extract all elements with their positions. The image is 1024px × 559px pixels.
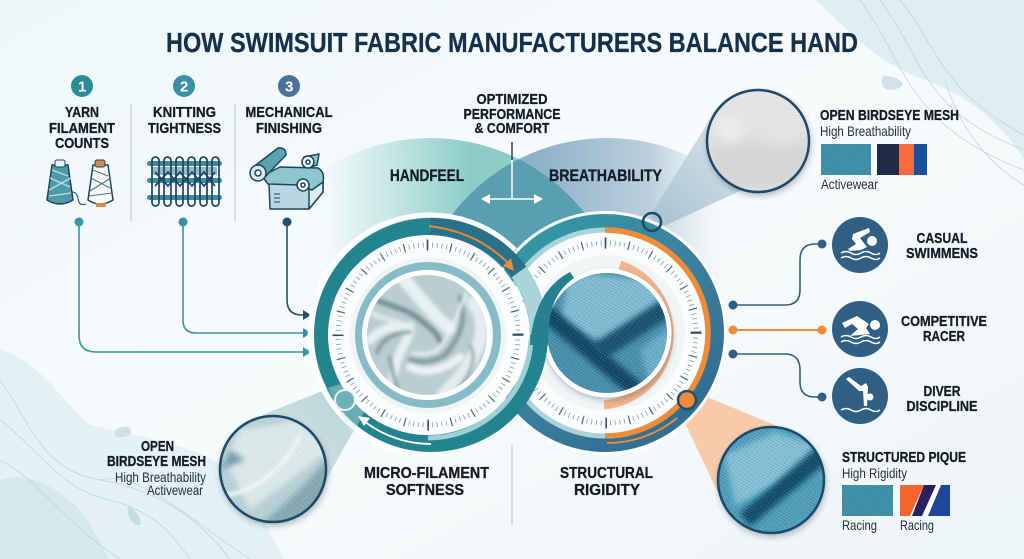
label: structural rigidity: STRUCTURAL — [560, 465, 653, 482]
step 1: yarn filament counts: COUNTS — [55, 135, 109, 152]
step 2: knitting tightness: KNITTING — [153, 104, 216, 121]
text: diver discipline: DISCIPLINE — [906, 398, 978, 415]
text: open birdseye mesh left: High Breathability — [115, 469, 206, 485]
swatch: racing stripes — [900, 485, 950, 516]
swatch: navy orange blue — [877, 144, 927, 175]
step 1: yarn filament counts: 1 — [78, 78, 86, 96]
title: HOW SWIMSUIT FABRIC MANUFACTURERS BALANCE HAND — [166, 27, 858, 58]
fabric photo: silk — [365, 273, 490, 398]
fabric swatch circle: open birdseye mesh top — [705, 88, 811, 194]
connectors from right dial to swimmers — [728, 240, 826, 402]
dial ticks — [338, 245, 518, 425]
text: casual swimmens — [906, 230, 978, 262]
label: micro-filament softness: MICRO-FILAMENT — [364, 465, 489, 482]
step 1: yarn filament counts: YARN — [65, 104, 99, 121]
label: optimized performance and comfort: PERFORMANCE — [464, 106, 560, 123]
text: open birdseye mesh top right — [820, 107, 959, 192]
marker: left dial — [335, 390, 355, 410]
step 3: mechanical finishing: 3 — [285, 78, 293, 96]
icon: yarn spools — [47, 160, 113, 207]
step 3: mechanical finishing: FINISHING — [256, 120, 322, 137]
dial ticks — [516, 243, 696, 423]
venn overlap arrow — [481, 142, 543, 204]
orange progress band — [605, 230, 708, 436]
text: open birdseye mesh left: BIRDSEYE MESH — [107, 453, 206, 470]
label: micro-filament softness: SOFTNESS — [386, 482, 464, 499]
peach arc — [604, 265, 669, 405]
text: structured pique: Racing — [842, 517, 877, 533]
white outline of left ring — [310, 215, 515, 453]
text: structured pique: Racing — [900, 517, 934, 533]
light ring segment — [519, 272, 539, 335]
column dividers — [131, 104, 235, 221]
text: diver discipline — [906, 383, 978, 415]
heading: handfeel: HANDFEEL — [390, 166, 464, 185]
icon: competitive swimmer — [832, 301, 888, 357]
label: structural rigidity: RIGIDITY — [574, 482, 640, 499]
step 1: yarn filament counts: FILAMENT — [49, 120, 115, 137]
step 2: knitting tightness — [147, 75, 222, 206]
text: casual swimmens: SWIMMENS — [906, 245, 978, 262]
text: competitive racer: COMPETITIVE — [901, 313, 987, 330]
white direction arrow — [358, 416, 431, 444]
orange direction arrow — [429, 226, 514, 271]
text: structured pique — [842, 449, 966, 533]
text: open birdseye mesh top right: OPEN BIRDSEYE MESH — [820, 107, 959, 124]
interlocking curve between dials — [530, 272, 574, 345]
label: micro-filament softness — [364, 465, 489, 499]
icon: casual swimmer — [832, 217, 888, 273]
label: structural rigidity — [560, 465, 653, 499]
text: casual swimmens: CASUAL — [916, 230, 968, 247]
callout wedge: bottom left — [262, 384, 364, 480]
label: optimized performance and comfort — [464, 91, 560, 137]
text: structured pique: High Rigidity — [842, 465, 907, 481]
label: optimized performance and comfort: OPTIMIZED — [476, 91, 548, 108]
marker: right dial bottom — [678, 391, 696, 409]
venn lenses: handfeel and breathability — [336, 138, 708, 268]
wedge tint over left ring — [328, 384, 364, 436]
text: competitive racer: RACER — [923, 328, 965, 345]
light inner band lower right — [428, 340, 531, 438]
step 1: yarn filament counts — [47, 75, 115, 207]
text: open birdseye mesh top right: High Breathability — [820, 123, 911, 139]
step 3: mechanical finishing — [246, 75, 332, 209]
fabric swatch circle: structured pique — [716, 425, 826, 535]
swatch: teal fabric — [842, 485, 893, 516]
icon: finishing machine — [250, 148, 323, 209]
fabric photo: structured pique — [548, 273, 667, 393]
text: diver discipline: DIVER — [924, 383, 961, 400]
left dial — [310, 215, 539, 453]
fabric swatch circle: open birdseye mesh left — [218, 414, 330, 526]
light teal inner band — [502, 230, 708, 436]
heading: breathability: BREATHABILITY — [549, 166, 663, 185]
step 2: knitting tightness: TIGHTNESS — [148, 120, 221, 137]
step 2: knitting tightness: 2 — [180, 78, 188, 96]
marker: right dial top — [643, 213, 661, 231]
darker ring segment — [431, 227, 519, 272]
icon: diver — [832, 368, 888, 424]
step 3: mechanical finishing: MECHANICAL — [246, 104, 332, 121]
callout wedge: top right — [650, 116, 742, 228]
text: open birdseye mesh left: Activewear — [147, 482, 203, 498]
callout wedge: bottom right — [678, 392, 782, 514]
text: structured pique: STRUCTURED PIQUE — [842, 449, 966, 466]
text: competitive racer — [901, 313, 987, 345]
label: optimized performance and comfort: & COMFORT — [474, 120, 550, 137]
thin orange arc — [607, 418, 677, 443]
connector lines from steps to left dial — [74, 218, 311, 357]
bottom divider — [511, 445, 513, 525]
swatch: teal fabric — [821, 144, 871, 175]
right dial — [483, 211, 727, 455]
icon: knit structure — [147, 157, 222, 206]
text: open birdseye mesh top right: Activewear — [821, 176, 878, 192]
text: open birdseye mesh left: OPEN — [141, 438, 174, 455]
text: open birdseye mesh left — [107, 438, 206, 498]
